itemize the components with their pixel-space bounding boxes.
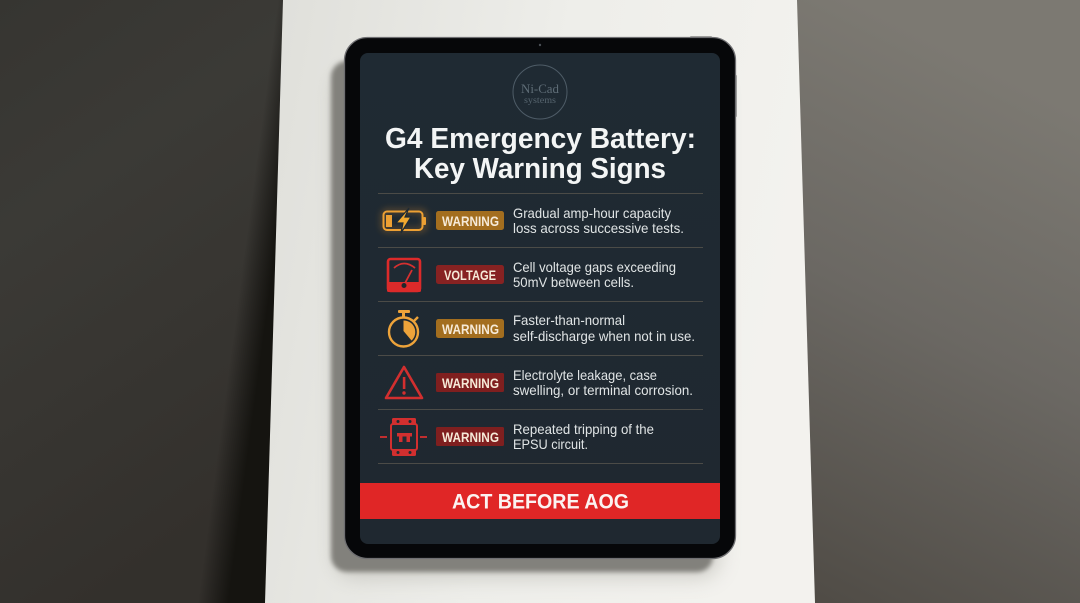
text: self-discharge [513, 312, 695, 344]
text: tripping: EPSU circuit. [513, 436, 588, 452]
tablet screen [360, 53, 720, 544]
badge: voltage [436, 265, 504, 284]
text: capacity loss: Gradual amp-hour capacity [513, 205, 671, 221]
text: tripping: Repeated tripping of the [513, 421, 654, 437]
title: G4 Emergency Battery: [385, 123, 696, 155]
text: voltage gaps: Cell voltage gaps exceeding [513, 259, 676, 275]
text: voltage gaps: 50mV between cells. [513, 274, 634, 290]
row 4: leakage [386, 367, 693, 398]
text: self-discharge: Faster-than-normal [513, 312, 625, 328]
banner: act before AOG [360, 483, 720, 519]
row 3: self-discharge [389, 310, 695, 346]
text: voltage gaps [513, 259, 676, 290]
tablet [331, 36, 737, 578]
icon: stopwatch [389, 310, 418, 346]
badge: warning: WARNING [442, 429, 499, 445]
row 5: tripping [380, 418, 654, 456]
text: capacity loss: loss across successive tests. [513, 220, 684, 236]
icon: warning triangle [386, 367, 422, 398]
icon: battery with lightning bolt [383, 208, 426, 233]
title [385, 123, 696, 185]
logo: Ni-Cad systems [513, 65, 567, 119]
badge: warning: WARNING [442, 375, 499, 391]
text: leakage: swelling, or terminal corrosion. [513, 382, 693, 398]
badge: warning: WARNING [442, 213, 499, 229]
logo: Ni-Cad systems: systems [524, 96, 556, 106]
text: capacity loss [513, 205, 684, 236]
icon: circuit breaker [380, 418, 427, 456]
text: leakage [513, 367, 693, 398]
text: self-discharge: self-discharge when not in use. [513, 328, 695, 344]
icon: voltmeter [387, 259, 421, 292]
text: leakage: Electrolyte leakage, case [513, 367, 657, 383]
row 2: voltage gaps [387, 259, 676, 292]
banner: act before AOG: ACT BEFORE AOG [452, 490, 629, 514]
logo: Ni-Cad systems: Ni-Cad [521, 81, 559, 96]
white paper sheet [265, 0, 815, 603]
badge: warning: WARNING [442, 321, 499, 337]
text: tripping [513, 421, 654, 452]
badge: voltage: VOLTAGE [444, 267, 496, 283]
row 1: capacity loss [383, 205, 684, 236]
title: Key Warning Signs [414, 153, 666, 185]
